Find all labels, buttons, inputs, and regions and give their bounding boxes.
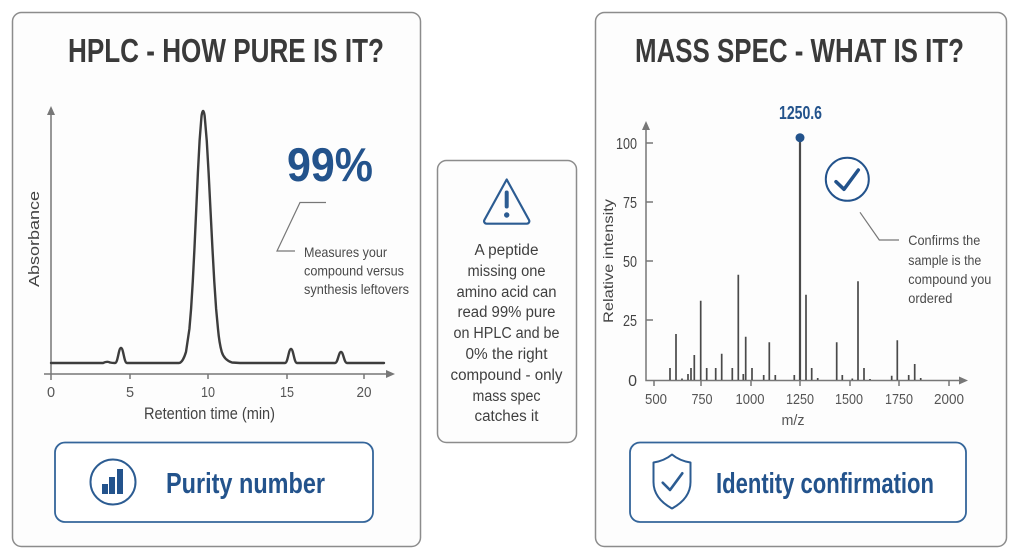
label: Purity number [166,468,325,500]
x tick labels: 1250 [786,392,814,408]
x tick labels [47,385,372,401]
axes and ticks [646,127,961,386]
label: Identity confirmation [716,468,934,500]
x-axis label: Retention time (min) [144,405,275,423]
y tick labels [616,136,637,390]
minor peaks [670,275,921,380]
x tick labels [645,392,964,408]
callout text: ordered [908,290,952,306]
y tick labels: 0 [628,373,637,390]
x-axis label: m/z [782,413,804,429]
axes [44,112,389,380]
warning text: missing one [468,263,546,280]
box frame [630,442,966,522]
result box: purity number [55,442,373,522]
x tick labels: 5 [126,385,134,401]
box frame [55,442,373,522]
callout text: Confirms the [908,232,980,248]
panel frame [596,12,1006,546]
callout leader line [277,202,326,251]
callout text [908,232,991,306]
heading: HPLC: HPLC - HOW PURE IS IT? [68,32,384,69]
callout text: compound versus [304,262,404,278]
x tick labels: 0 [47,385,55,401]
y tick labels: 75 [623,195,637,212]
panel: mass spec [596,12,1006,546]
icon: warning triangle [484,180,529,224]
icon: bar chart in circle [90,460,136,504]
x tick labels: 1000 [736,392,764,408]
mass spectrum chart [600,103,968,429]
panel: warning note [438,160,576,442]
warning text [450,242,563,425]
y tick labels: 100 [616,136,637,153]
panel: HPLC [12,12,420,546]
chromatogram chart [26,106,395,423]
x tick labels: 500 [645,392,667,408]
axis arrowheads [642,121,968,384]
callout text [304,244,409,297]
note frame [438,160,576,442]
callout text: sample is the [908,252,981,268]
warning text: amino acid can [456,284,556,301]
y tick labels: 25 [623,313,637,330]
main peak [796,133,804,380]
callout text: compound you [908,271,991,287]
warning text: catches it [474,408,539,425]
callout leader line [860,212,899,240]
main peak label: 1250.6 [779,103,822,123]
x tick labels: 1750 [885,392,913,408]
chromatogram trace [51,111,384,363]
warning text: A peptide [474,242,538,259]
warning text: 0% the right [466,346,548,363]
x tick labels: 20 [356,385,372,401]
x tick labels: 15 [280,385,294,401]
warning text: read 99% pure [458,304,556,321]
y tick labels: 50 [623,254,637,271]
stat: 99%: 99% [287,138,373,191]
warning text: compound - only [450,367,563,384]
axis arrowheads [47,106,395,378]
x tick labels: 750 [692,392,712,408]
icon: check in circle [826,158,869,201]
callout text: Measures your [304,244,387,260]
panel frame [12,12,420,546]
x tick labels: 2000 [934,392,964,408]
result box: identity confirmation [630,442,966,522]
warning text: on HPLC and be [454,325,560,342]
x tick labels: 10 [201,385,215,401]
y-axis label: Absorbance [26,191,43,287]
y-axis label: Relative intensity [600,199,616,323]
callout text: synthesis leftovers [304,281,409,297]
icon: shield with check [654,454,690,508]
x tick labels: 1500 [835,392,863,408]
warning text: mass spec [472,388,541,405]
